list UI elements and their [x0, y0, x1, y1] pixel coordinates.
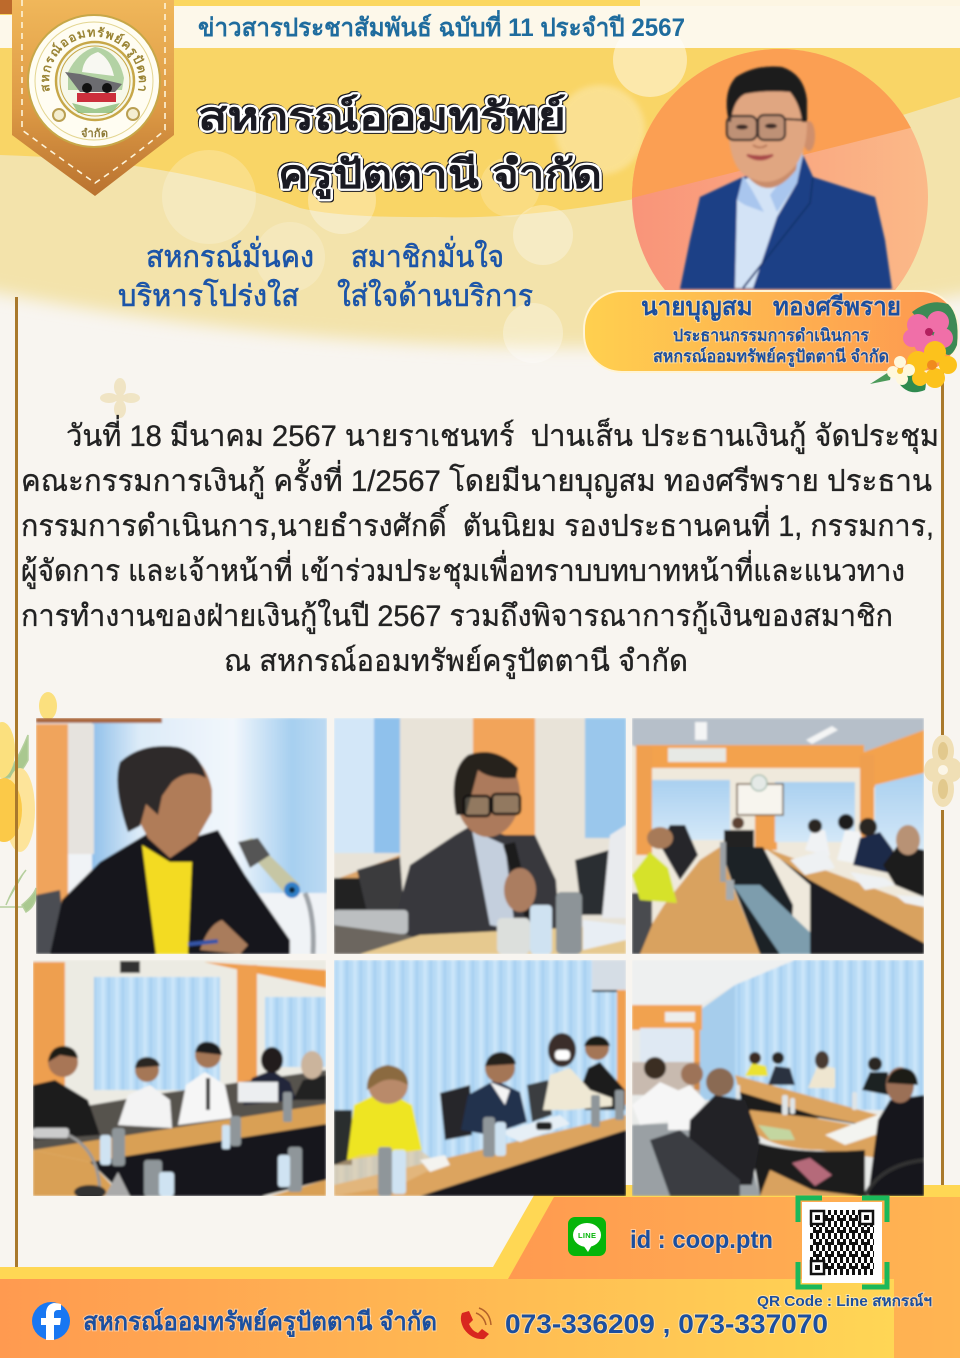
motto: สมาชิกมั่นใจ: [351, 236, 504, 274]
footer orange panel: [508, 1197, 960, 1358]
photo: chairman speaking: [333, 718, 626, 954]
newsletter issue line: ข่าวสารประชาสัมพันธ์ ฉบับที่ 11 ประจำปี 2567: [198, 10, 685, 42]
chairman name pill: นายบุญสม ทองศรีพราย: [641, 293, 901, 323]
chairman name pill: [584, 291, 958, 392]
chairman name pill: ประธานกรรมการดำเนินการ: [673, 326, 870, 345]
body text: วันที่ 18 มีนาคม 2567 นายราเชนทร์ ปานเส็น ประธานเงินกู้ จัดประชุม: [66, 415, 939, 455]
body text: คณะกรรมการเงินกู้ ครั้งที่ 1/2567 โดยมีนายบุญสม ทองศรีพราย ประธาน: [21, 459, 932, 500]
photo: meeting room from the end: [632, 960, 924, 1196]
line id: id : coop.ptn: [630, 1226, 773, 1254]
body text: ผู้จัดการ และเจ้าหน้าที่ เข้าร่วมประชุมเพื่อทราบบทบาทหน้าที่และแนวทาง: [21, 550, 905, 590]
left gold rule: [15, 297, 18, 1268]
facebook page name: สหกรณ์ออมทรัพย์ครูปัตตานี จำกัด: [83, 1307, 437, 1338]
logo: จำกัด: [81, 127, 108, 140]
left floral decoration: [0, 692, 57, 912]
photo: members reading documents: [334, 960, 626, 1196]
chairman portrait: [632, 49, 928, 290]
main title: สหกรณ์ออมทรัพย์: [198, 94, 566, 139]
icon: phone: [461, 1308, 491, 1339]
photo: meeting room overview: [632, 718, 924, 954]
chairman name pill: สหกรณ์ออมทรัพย์ครูปัตตานี จำกัด: [653, 346, 889, 368]
body text: [21, 415, 939, 679]
ornament: right rule: [924, 735, 960, 807]
footer yellow band: [0, 1185, 960, 1279]
ornament: small top-left: [100, 378, 140, 418]
icon: LINE: LINE: [578, 1231, 596, 1240]
icon: LINE: [568, 1217, 606, 1256]
motto: [118, 236, 533, 313]
ribbon with logo: [0, 0, 174, 196]
phone numbers: 073-336209 , 073-337070: [505, 1309, 828, 1339]
photo: chairman of loans at microphone: [36, 718, 327, 954]
footer bottom band: [0, 1279, 894, 1358]
QR code: [798, 1198, 887, 1287]
logo: [27, 14, 161, 148]
motto: ใส่ใจด้านบริการ: [337, 279, 533, 313]
body text: การทำงานของฝ่ายเงินกู้ในปี 2567 รวมถึงพิจารณาการกู้เงินของสมาชิก: [21, 599, 893, 634]
QR caption: QR Code : Line สหกรณ์ฯ: [757, 1292, 932, 1310]
icon: flowers: [870, 302, 958, 392]
motto: บริหารโปร่งใส: [118, 278, 299, 313]
icon: Facebook: [32, 1302, 70, 1340]
photo: committee members at table: [33, 960, 326, 1199]
body text: กรรมการดำเนินการ,นายธำรงศักดิ์ ตันนิยม รองประธานคนที่ 1, กรรมการ,: [21, 504, 934, 543]
main title: [198, 94, 602, 199]
right gold rule: [941, 372, 944, 1188]
header background: [0, 0, 960, 363]
motto: สหกรณ์มั่นคง: [146, 236, 314, 274]
body text: ณ สหกรณ์ออมทรัพย์ครูปัตตานี จำกัด: [224, 644, 688, 679]
main title: ครูปัตตานี จำกัด: [278, 153, 602, 199]
